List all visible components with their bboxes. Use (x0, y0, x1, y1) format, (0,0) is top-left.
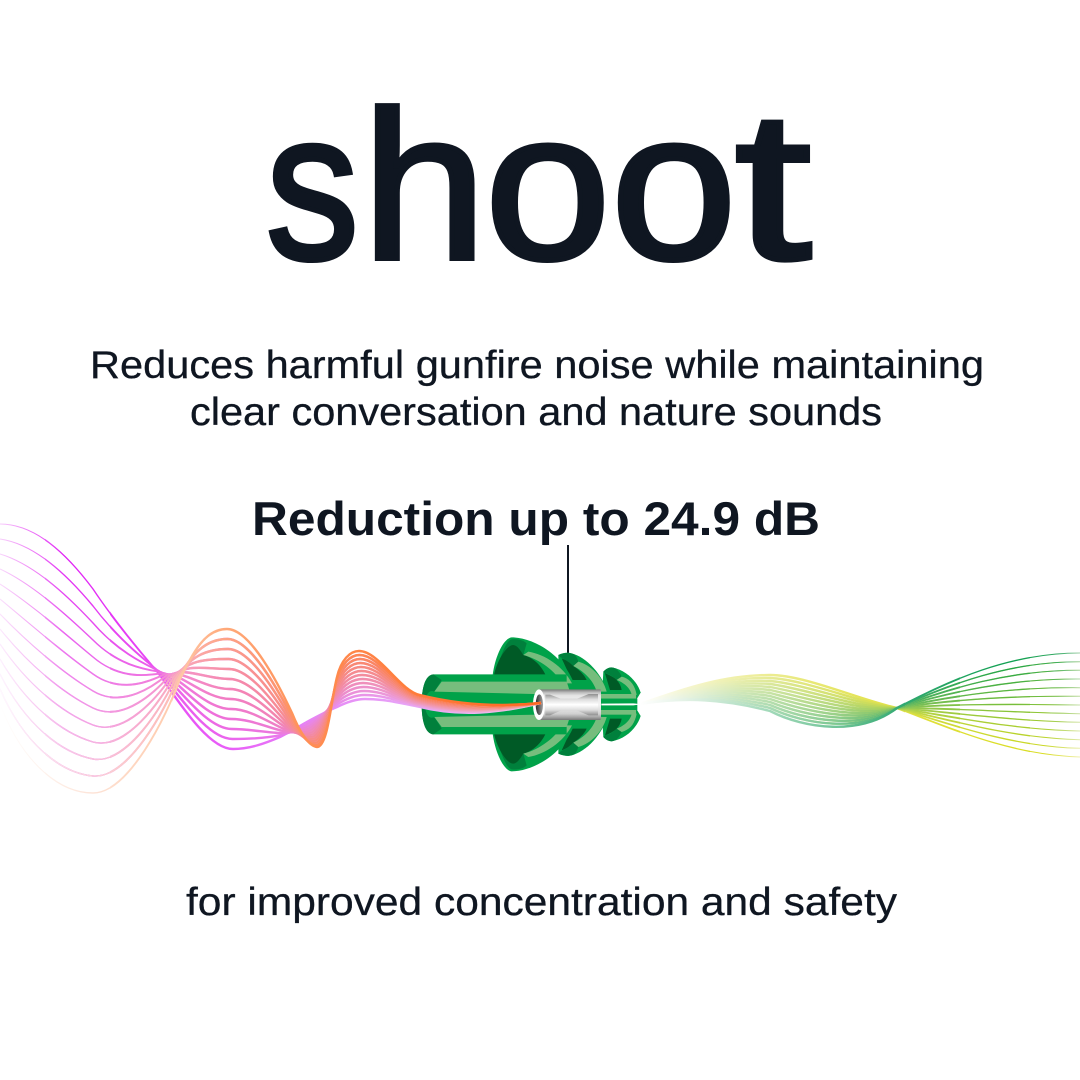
icon: metal filter insert (533, 689, 601, 720)
icon: green earplug cross-section (422, 637, 641, 771)
title: s (266, 68, 359, 304)
closing statement: for improved concentration and safety (186, 881, 898, 924)
title: t (735, 67, 811, 303)
description text: Reduces harmful gunfire noise while maintaining (90, 344, 984, 387)
sound wave: filtered, green and yellow (640, 653, 1080, 757)
description text (90, 344, 984, 434)
sound wave: incoming gunfire noise, magenta and orange (0, 524, 541, 793)
title: o (611, 68, 737, 304)
title: o (485, 68, 611, 304)
title: h (362, 68, 486, 304)
title (266, 67, 811, 304)
noise reduction callout: Reduction up to 24.9 dB (252, 492, 820, 545)
description text: clear conversation and nature sounds (190, 391, 882, 434)
callout leader line (567, 545, 569, 655)
